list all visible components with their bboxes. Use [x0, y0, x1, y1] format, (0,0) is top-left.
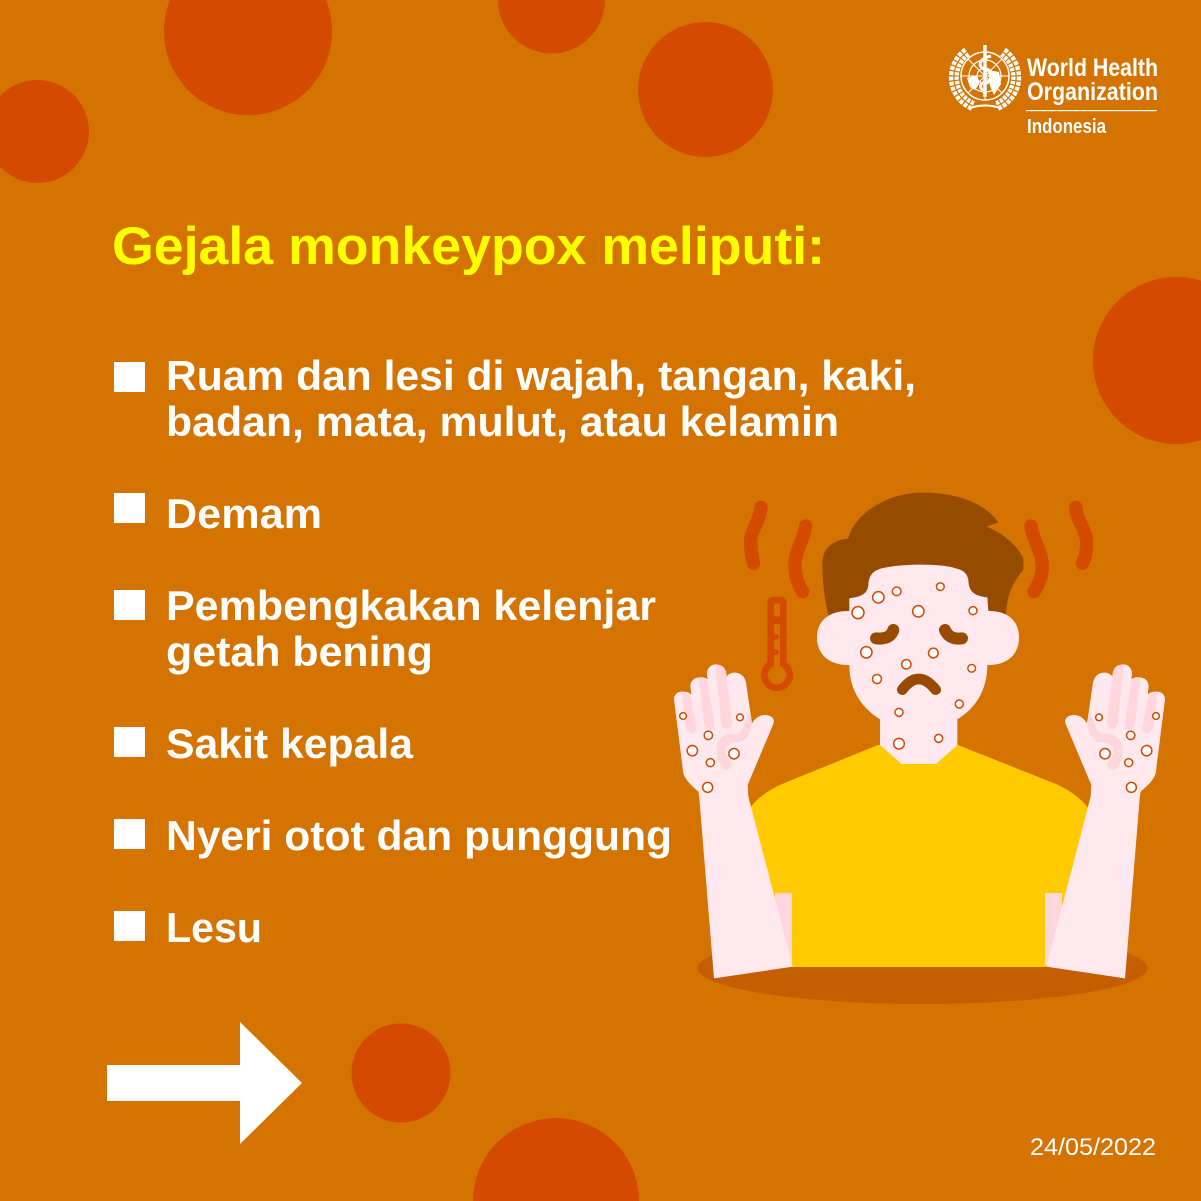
right hand lesions	[1096, 713, 1159, 792]
illustration: sick person	[674, 493, 1165, 1004]
symptom: swollen lymph nodes: getah bening	[166, 628, 433, 675]
hair	[822, 493, 1023, 618]
country name: Indonesia	[1027, 116, 1107, 138]
ground shadow	[698, 932, 1148, 1004]
title: Gejala monkeypox meliputi:	[112, 217, 825, 276]
symptom: rash and lesions: badan, mata, mulut, atau kelamin	[166, 398, 839, 445]
right arm and hand	[1046, 664, 1165, 978]
sleeve shading	[775, 893, 1062, 965]
symptom: muscle and back pain: Nyeri otot dan punggung	[166, 812, 672, 859]
eyes and mouth	[876, 630, 962, 690]
palm creases	[682, 665, 752, 770]
symptom: headache: Sakit kepala	[166, 720, 414, 767]
heat waves	[751, 507, 1087, 592]
symptom: fatigue	[114, 904, 262, 951]
face lesions	[852, 583, 977, 749]
date: 24/05/2022	[1030, 1134, 1156, 1161]
symptom list	[114, 352, 916, 951]
symptom: rash and lesions	[114, 352, 916, 445]
symptom: fatigue: Lesu	[166, 904, 262, 951]
WHO wordmark: World Health	[1027, 54, 1158, 82]
shirt	[750, 745, 1088, 967]
symptom: swollen lymph nodes	[114, 582, 656, 675]
face	[817, 565, 1019, 764]
left hand lesions	[680, 713, 743, 792]
next arrow	[107, 1022, 302, 1144]
symptom: rash and lesions: Ruam dan lesi di wajah, tangan, kaki,	[166, 352, 916, 399]
thermometer icon	[764, 600, 790, 688]
left arm and hand	[674, 664, 793, 978]
symptom: swollen lymph nodes: Pembengkakan kelenjar	[166, 582, 656, 629]
WHO logo	[954, 45, 1158, 138]
symptom: fever: Demam	[166, 490, 322, 537]
WHO emblem	[954, 45, 1016, 108]
palm creases	[1087, 665, 1157, 770]
head and neck	[751, 493, 1087, 764]
WHO logo: Organization	[1027, 78, 1158, 106]
